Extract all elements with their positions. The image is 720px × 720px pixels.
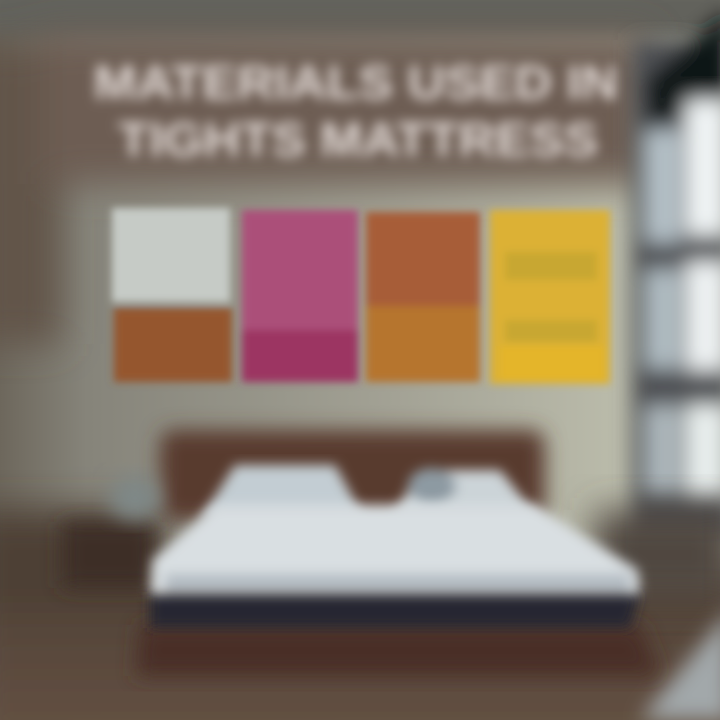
floor highlight at the lower right: [640, 610, 720, 720]
floor: [0, 510, 720, 720]
mattress base: [150, 592, 640, 628]
column 4: yellow: [490, 210, 610, 384]
window on the right: [632, 10, 720, 540]
bed frame: [136, 625, 660, 676]
mattress: [150, 505, 640, 594]
left nightstand and lamp: [62, 476, 161, 588]
poster: four material columns: [112, 208, 610, 384]
title: MATERIALS USED IN: [94, 57, 618, 110]
title: TIGHTS MATTRESS: [118, 114, 598, 167]
pillows: [200, 465, 540, 520]
title: [94, 57, 618, 167]
bed headboard: [160, 430, 545, 520]
column 1: white and rust: [112, 208, 232, 382]
brown title band: [0, 34, 650, 344]
column 3: orange: [366, 212, 480, 382]
right nightstand shadow: [595, 510, 720, 600]
column 2: magenta: [242, 210, 358, 382]
